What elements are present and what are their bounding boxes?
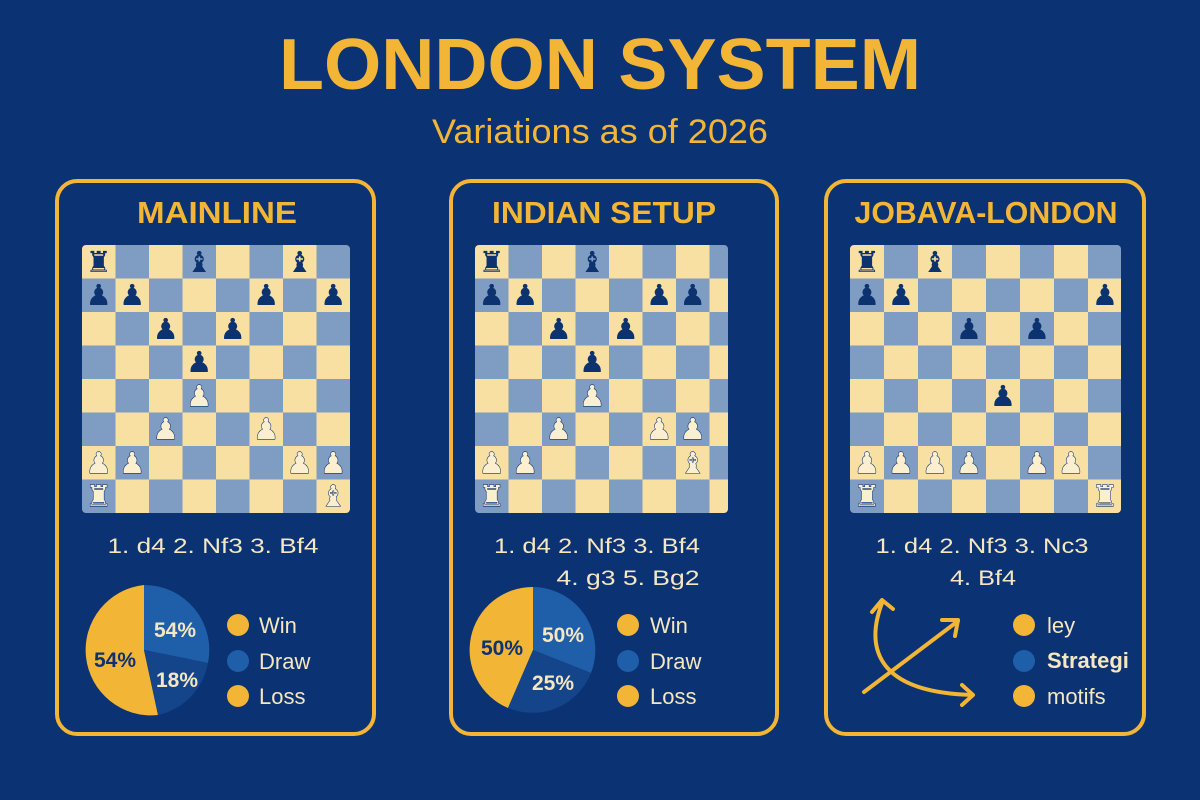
chess board: indian setup: ♟ xyxy=(546,312,572,346)
heading: mainline: MAINLINE xyxy=(137,195,297,230)
legend: indian setup: Win xyxy=(650,613,688,638)
chess board: jobava-london: ♟ xyxy=(854,278,880,312)
chess board: indian setup: ♟ xyxy=(613,312,639,346)
chess board: mainline: ♟ xyxy=(220,312,246,346)
chess board: indian setup: ♟ xyxy=(646,412,672,446)
legend: indian setup xyxy=(617,613,701,709)
pie chart: mainline: 18% xyxy=(156,669,198,692)
chess board: jobava-london: ♟ xyxy=(1024,446,1050,480)
chess board: mainline: ♝ xyxy=(186,245,212,279)
chess board: indian setup: ♟ xyxy=(479,278,505,312)
chess board: mainline: ♝ xyxy=(320,479,346,513)
chess board: indian setup: ♟ xyxy=(646,278,672,312)
chess board: jobava-london: ♜ xyxy=(854,479,880,513)
chess board: mainline: ♝ xyxy=(287,245,313,279)
chess board: indian setup: ♟ xyxy=(680,278,706,312)
chess board: mainline: ♟ xyxy=(119,278,145,312)
chess board: indian setup: ♜ xyxy=(479,479,505,513)
subtitle: Variations as of 2026 xyxy=(432,113,768,151)
title: LONDON SYSTEM xyxy=(279,25,921,105)
chess board: indian setup: ♟ xyxy=(512,278,538,312)
chess board: mainline xyxy=(82,245,350,513)
chess board: jobava-london: ♟ xyxy=(854,446,880,480)
pie chart: indian setup: 25% xyxy=(532,672,574,695)
chess board: indian setup: ♝ xyxy=(579,245,605,279)
icon: strategy arrows xyxy=(864,600,973,705)
chess board: jobava-london: ♟ xyxy=(956,312,982,346)
legend: jobava-london: motifs xyxy=(1047,684,1106,709)
pie chart: indian setup xyxy=(470,587,595,713)
heading: indian setup: INDIAN SETUP xyxy=(492,195,716,230)
legend: mainline xyxy=(227,613,310,709)
chess board: indian setup: ♟ xyxy=(512,446,538,480)
chess board: jobava-london: ♜ xyxy=(854,245,880,279)
chess board: mainline: ♟ xyxy=(253,412,279,446)
chess board: indian setup xyxy=(475,245,728,513)
chess board: mainline: ♟ xyxy=(287,446,313,480)
legend: jobava-london: Strategi xyxy=(1047,648,1129,673)
chess board: indian setup: ♟ xyxy=(579,379,605,413)
chess board: mainline: ♜ xyxy=(86,245,112,279)
chess board: mainline: ♟ xyxy=(320,446,346,480)
legend: indian setup: Draw xyxy=(650,649,701,674)
chess board: mainline: ♟ xyxy=(86,278,112,312)
legend: jobava-london: ley xyxy=(1047,613,1075,638)
chess board: mainline: ♟ xyxy=(186,345,212,379)
chess board: jobava-london: ♟ xyxy=(1058,446,1084,480)
chess board: jobava-london: ♝ xyxy=(922,245,948,279)
chess board: indian setup: ♟ xyxy=(546,412,572,446)
panel: jobava-london xyxy=(826,181,1144,734)
pie chart: mainline xyxy=(86,585,209,715)
chess board: jobava-london: ♜ xyxy=(1092,479,1118,513)
chess board: mainline: ♟ xyxy=(253,278,279,312)
moves: indian setup: 1. d4 2. Nf3 3. Bf4 xyxy=(494,535,700,558)
panel: jobava-london: 4. Bf4 xyxy=(950,567,1016,590)
chess board: indian setup: ♝ xyxy=(680,446,706,480)
legend: mainline: Draw xyxy=(259,649,310,674)
panel: indian setup: 4. g3 5. Bg2 xyxy=(556,567,700,590)
panel: indian setup xyxy=(451,181,777,734)
pie chart: mainline: 54% xyxy=(154,619,196,642)
chess board: mainline: ♟ xyxy=(320,278,346,312)
chess board: mainline: ♟ xyxy=(86,446,112,480)
pie chart: indian setup: 50% xyxy=(542,624,584,647)
chess board: jobava-london: ♟ xyxy=(922,446,948,480)
chess board: mainline: ♜ xyxy=(86,479,112,513)
pie chart: mainline: 54% xyxy=(94,649,136,672)
chess board: mainline: ♟ xyxy=(153,412,179,446)
legend: jobava-london xyxy=(1013,613,1129,709)
chess board: indian setup: ♟ xyxy=(680,412,706,446)
chess board: jobava-london xyxy=(850,245,1121,513)
moves: jobava-london: 1. d4 2. Nf3 3. Nc3 xyxy=(876,535,1088,558)
chess board: jobava-london: ♟ xyxy=(1092,278,1118,312)
chess board: indian setup: ♟ xyxy=(579,345,605,379)
chess board: jobava-london: ♟ xyxy=(888,278,914,312)
moves: mainline: 1. d4 2. Nf3 3. Bf4 xyxy=(108,535,319,558)
chess board: jobava-london: ♟ xyxy=(888,446,914,480)
heading: jobava-london: JOBAVA-LONDON xyxy=(854,195,1118,230)
chess board: jobava-london: ♟ xyxy=(990,379,1016,413)
chess board: jobava-london: ♟ xyxy=(956,446,982,480)
pie chart: indian setup: 50% xyxy=(481,637,523,660)
legend: mainline: Loss xyxy=(259,684,305,709)
chess board: mainline: ♟ xyxy=(186,379,212,413)
panel: mainline xyxy=(57,181,374,734)
chess board: jobava-london: ♟ xyxy=(1024,312,1050,346)
chess board: indian setup: ♟ xyxy=(479,446,505,480)
chess board: mainline: ♟ xyxy=(119,446,145,480)
chess board: mainline: ♟ xyxy=(153,312,179,346)
legend: indian setup: Loss xyxy=(650,684,696,709)
legend: mainline: Win xyxy=(259,613,297,638)
chess board: indian setup: ♜ xyxy=(479,245,505,279)
